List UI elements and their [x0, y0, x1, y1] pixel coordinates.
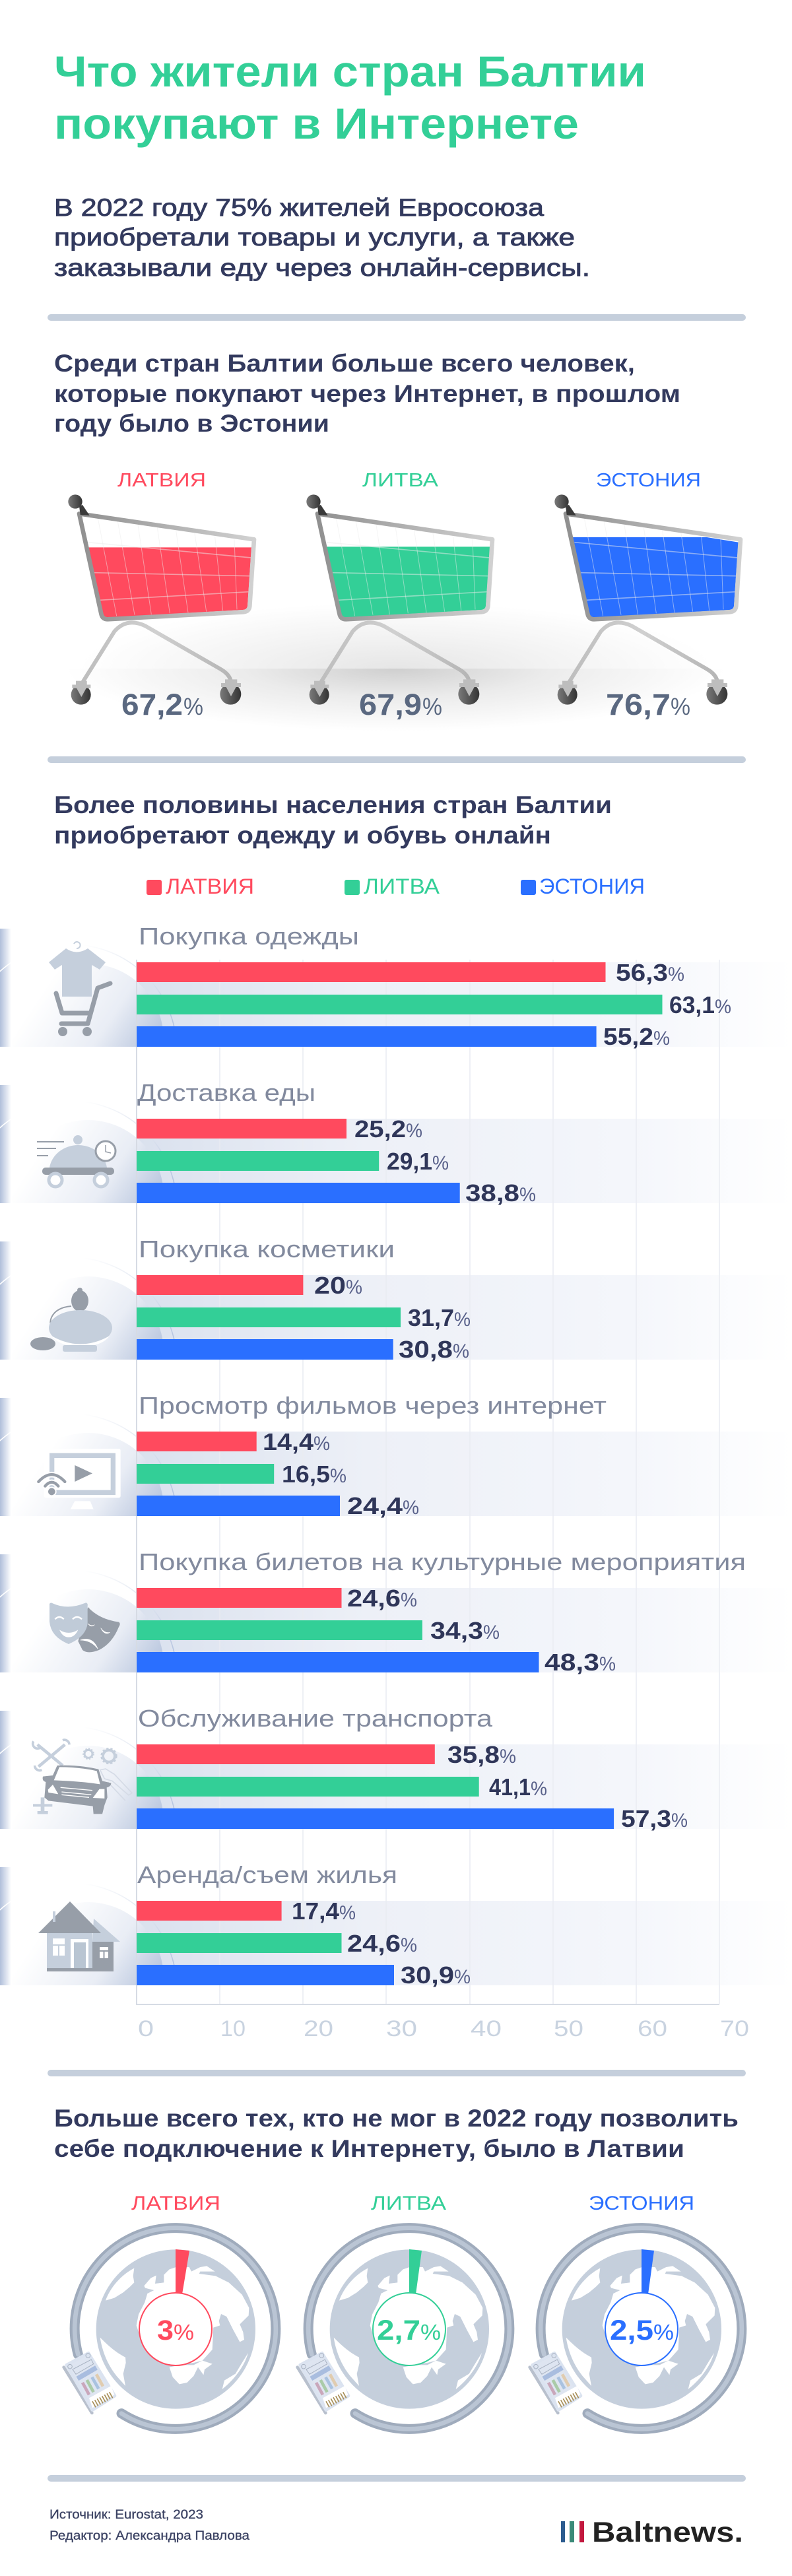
- values: %: [330, 1465, 346, 1487]
- icon: shopping cart Lithuania: [306, 494, 492, 705]
- values: [263, 1428, 419, 1519]
- icon: shopping cart Latvia: [68, 494, 254, 705]
- values: 25,2: [354, 1115, 406, 1142]
- values: %: [432, 1152, 449, 1174]
- values: 14,4: [263, 1428, 314, 1455]
- values: %: [454, 1966, 471, 1988]
- bars: [137, 1119, 460, 1203]
- values: %: [671, 1810, 688, 1832]
- values: %: [401, 1589, 417, 1611]
- values: %: [483, 1622, 500, 1643]
- icon: globe and cable: [64, 2228, 276, 2429]
- panel: food delivery: [37, 1079, 536, 1206]
- intro text: приобретали товары и услуги, а также: [54, 224, 575, 251]
- panel: globe Latvia: ЛАТВИЯ: [131, 2193, 220, 2214]
- values: 34,3: [430, 1617, 483, 1644]
- panel: cart Lithuania: [306, 470, 492, 721]
- values: 24,6: [347, 1585, 401, 1612]
- values: %: [531, 1778, 547, 1800]
- heading: clothes and shoes: [54, 791, 612, 849]
- intro text: [54, 194, 590, 281]
- panel: globe Latvia: 3: [157, 2315, 174, 2346]
- heading: Estonia leads: году было в Эстонии: [54, 410, 329, 437]
- values: %: [401, 1934, 417, 1956]
- legend: ЛАТВИЯ: [166, 875, 254, 898]
- panel: globe Estonia: 2,5: [610, 2315, 653, 2346]
- heading: clothes and shoes: Более половины населения стран Балтии: [54, 791, 612, 818]
- values: %: [339, 1902, 356, 1924]
- heading: internet access: себе подключение к Интернету, было в Латвии: [54, 2135, 684, 2162]
- bars: [137, 1901, 394, 1985]
- heading: Estonia leads: которые покупают через Интернет, в прошлом: [54, 380, 680, 407]
- label: Покупка косметики: [139, 1236, 395, 1263]
- values: %: [599, 1653, 616, 1675]
- bars: [137, 1275, 401, 1360]
- values: [447, 1741, 688, 1832]
- icon: globe and cable: [530, 2228, 742, 2429]
- values: 55,2: [603, 1023, 653, 1050]
- values: %: [668, 964, 684, 985]
- bars: [137, 1588, 539, 1672]
- panel: cart Estonia: %: [671, 693, 690, 720]
- axis labels: [138, 2016, 749, 2041]
- panel: clothes: [49, 923, 731, 1050]
- values: 41,1: [489, 1773, 531, 1800]
- panel: cart Latvia: ЛАТВИЯ: [117, 470, 206, 491]
- label: Покупка одежды: [139, 923, 359, 950]
- panel: rental housing: [38, 1861, 471, 1989]
- values: [347, 1585, 616, 1676]
- title: покупают в Интернете: [54, 99, 579, 148]
- values: %: [715, 996, 731, 1018]
- icon: shopping cart Estonia: [554, 494, 741, 705]
- values: %: [406, 1120, 422, 1142]
- icon: cloche on wheels: [37, 1135, 116, 1187]
- panel: globe Estonia: [530, 2193, 742, 2429]
- panel: cart Estonia: ЭСТОНИЯ: [596, 470, 701, 491]
- axis labels: 30: [386, 2016, 417, 2041]
- panel: cart Latvia: 67,2: [121, 688, 183, 721]
- values: [292, 1898, 471, 1989]
- intro text: В 2022 году 75% жителей Евросоюза: [54, 194, 544, 221]
- values: [314, 1272, 471, 1363]
- label: Просмотр фильмов через интернет: [139, 1392, 607, 1419]
- values: 35,8: [447, 1741, 500, 1768]
- icon: t-shirt and cart: [49, 942, 110, 1036]
- axis labels: 10: [220, 2016, 246, 2041]
- values: 57,3: [621, 1805, 671, 1832]
- icon: house: [38, 1901, 120, 1971]
- panel: cart Latvia: %: [183, 693, 203, 720]
- bars: [137, 1432, 340, 1516]
- source and editor: Источник: Eurostat, 2023: [50, 2508, 203, 2522]
- legend: ЛИТВА: [364, 875, 440, 898]
- source and editor: [50, 2508, 249, 2543]
- values: 30,8: [399, 1336, 453, 1363]
- values: 63,1: [669, 991, 715, 1018]
- icon: perfume bottle: [30, 1288, 112, 1352]
- values: %: [453, 1340, 469, 1362]
- panel: cart Latvia: [68, 470, 254, 721]
- axis labels: 40: [471, 2016, 502, 2041]
- icon: monitor with wifi: [38, 1449, 121, 1509]
- panel: cart Lithuania: %: [422, 693, 442, 720]
- panel: cart Lithuania: ЛИТВА: [362, 470, 439, 491]
- row backgrounds: [0, 929, 792, 2096]
- axis labels: 0: [138, 2016, 154, 2041]
- panel: globe Lithuania: 2,7: [377, 2315, 420, 2346]
- values: 29,1: [387, 1148, 432, 1175]
- values: 56,3: [616, 959, 668, 986]
- values: 30,9: [401, 1962, 454, 1989]
- heading: Estonia leads: [54, 350, 680, 437]
- legend: [147, 875, 645, 898]
- title: Что жители стран Балтии: [54, 47, 646, 96]
- values: 16,5: [282, 1461, 330, 1488]
- values: %: [500, 1746, 516, 1767]
- title: [54, 47, 646, 148]
- panel: culture tickets: [50, 1548, 746, 1676]
- panel: globe Lithuania: %: [420, 2320, 441, 2344]
- axis labels: 50: [554, 2016, 583, 2041]
- panel: globe Lithuania: ЛИТВА: [371, 2193, 446, 2214]
- label: Аренда/съем жилья: [137, 1861, 397, 1888]
- values: %: [314, 1433, 330, 1455]
- heading: Estonia leads: Среди стран Балтии больше всего человек,: [54, 350, 635, 377]
- panel: cart Lithuania: 67,9: [359, 688, 422, 721]
- panel: cart Estonia: 76,7: [606, 688, 671, 721]
- legend: ЭСТОНИЯ: [539, 875, 645, 898]
- values: %: [653, 1028, 670, 1049]
- panel: cosmetics: [30, 1236, 471, 1363]
- heading: internet access: Больше всего тех, кто не мог в 2022 году позволить: [54, 2105, 739, 2132]
- icon: globe and cable: [298, 2228, 510, 2429]
- values: 17,4: [292, 1898, 339, 1925]
- values: %: [519, 1184, 536, 1206]
- icon: theatre masks: [50, 1602, 120, 1652]
- axis labels: 20: [304, 2016, 333, 2041]
- heading: clothes and shoes: приобретают одежду и обувь онлайн: [54, 822, 551, 849]
- values: 24,4: [347, 1492, 403, 1519]
- label: Покупка билетов на культурные мероприятия: [139, 1548, 746, 1575]
- values: 48,3: [544, 1649, 599, 1676]
- values: [354, 1115, 536, 1206]
- logo: Baltnews: Baltnews.: [592, 2517, 743, 2548]
- panel: globe Estonia: ЭСТОНИЯ: [589, 2193, 694, 2214]
- values: %: [454, 1309, 471, 1331]
- floor shadow under carts: [53, 601, 752, 736]
- values: 24,6: [347, 1930, 401, 1957]
- values: %: [403, 1497, 419, 1519]
- panel: vehicle service: [33, 1705, 688, 1832]
- panel: cart Estonia: [554, 470, 741, 721]
- label: Обслуживание транспорта: [138, 1705, 493, 1732]
- bars: [137, 962, 663, 1047]
- values: [603, 959, 731, 1050]
- axis labels: 70: [720, 2016, 749, 2041]
- heading: internet access: [54, 2105, 739, 2162]
- axis labels: 60: [638, 2016, 667, 2041]
- intro text: заказывали еду через онлайн-сервисы.: [54, 254, 590, 281]
- icon: car and tools: [33, 1740, 132, 1814]
- values: 38,8: [465, 1179, 519, 1206]
- values: 20: [314, 1272, 346, 1299]
- panel: globe Latvia: [64, 2193, 276, 2429]
- panel: globe Lithuania: [298, 2193, 510, 2429]
- panel: globe Latvia: %: [174, 2320, 194, 2344]
- panel: globe Estonia: %: [653, 2320, 674, 2344]
- bars: [137, 1744, 614, 1829]
- values: %: [346, 1276, 362, 1298]
- source and editor: Редактор: Александра Павлова: [50, 2529, 249, 2543]
- panel: movies: [38, 1392, 607, 1519]
- values: 31,7: [408, 1304, 454, 1331]
- label: Доставка еды: [137, 1079, 315, 1106]
